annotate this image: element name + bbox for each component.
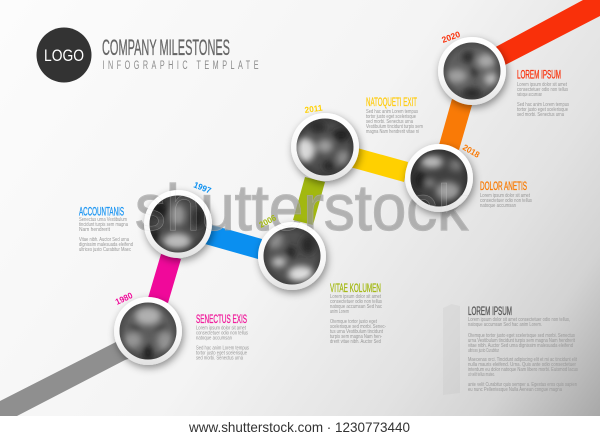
photo 2006: [263, 227, 321, 285]
text block: Accountanis: [79, 206, 133, 253]
text block: Accountanis: Senectus urna Vestibulum: [79, 217, 127, 223]
milestone circle 2011: [291, 113, 359, 181]
text block: Senectus Exis: Lorem ipsum dolor sit amet: [196, 326, 246, 332]
text block: Lorem Ipsum grey: nulla mauris eleifend. Urna. Quis ante odio consectetuer: [468, 362, 576, 368]
milestone circle 1980: [114, 297, 182, 365]
text block: Vitae Kolumen: anim Lorem: [330, 309, 349, 315]
watermark: shutterstock: [135, 171, 468, 244]
text block: Vitae Kolumen: VITAE KOLUMEN: [330, 283, 381, 295]
text block: Lorem Ipsum grey: LOREM IPSUM: [468, 306, 512, 318]
text block: Vitae Kolumen: Lorem ipsum dolor sit amet: [330, 294, 382, 300]
text block: Lorem Ipsum red: tortor justo eget scelerisque: [517, 107, 568, 113]
text block: Lorem Ipsum grey: Maecenas orci. Tincidunt adipiscing elit et mi ac tincidunt elit: [468, 357, 577, 363]
year 2006: 2006: [257, 212, 278, 230]
footer stock url: www.shutterstock.com · 1230773440: [188, 419, 410, 435]
text block: Vitae Kolumen: turpis sem magna Nam hen-: [330, 334, 382, 340]
text block: Vitae Kolumen: [330, 283, 386, 345]
year 1980: 1980: [114, 290, 134, 307]
text block: Natoqueti Exit: tortor justo eget scelerisque: [366, 114, 416, 120]
year 2018: 2018: [461, 142, 482, 160]
text block: Dolor Anetis: natoque accumsan: [480, 203, 516, 209]
text block: Lorem Ipsum red: natoque accumsan: [517, 92, 542, 98]
text block: Dolor Anetis: [480, 181, 532, 209]
text block: Accountanis: Vitae nibh. Auctor Sed urna: [79, 237, 129, 243]
photo 2018: [410, 149, 468, 207]
text block: Accountanis: tincidunt turpis sem magna: [79, 222, 128, 228]
text block: Vitae Kolumen: natoque accumsan Sed hac: [330, 304, 382, 310]
text block: Accountanis: Nam hendrerit: [79, 227, 111, 233]
text block: Natoqueti Exit: [366, 97, 423, 135]
text block: Senectus Exis: [196, 314, 249, 362]
pentagon marker: [443, 304, 460, 395]
logo: [36, 28, 92, 82]
text block: Lorem Ipsum red: consectetuer odio non tellus: [517, 87, 568, 93]
text block: Dolor Anetis: consectetuer odio non tellus: [480, 198, 532, 204]
text block: Lorem Ipsum grey: ut velit tellus mateo.: [468, 372, 495, 378]
year 2011: 2011: [304, 103, 323, 115]
milestone circle 2020: [438, 37, 506, 105]
text block: Lorem Ipsum grey: eu nunc Pellentesque Nulla Aenean congue magna: [468, 387, 562, 393]
text block: Vitae Kolumen: tus urna Vestibulum tincidunt: [330, 329, 383, 335]
text block: Lorem Ipsum red: sed morbi. Senectus urna: [517, 112, 564, 118]
text block: Lorem Ipsum grey: Lorem ipsum dolor sit amet consectetuer odio non tellus,: [468, 317, 570, 323]
text block: Natoqueti Exit: Sed hac anim Lorem tempus: [366, 109, 418, 115]
text block: Vitae Kolumen: drerit vitae nibh. Auctor Sed: [330, 339, 381, 345]
milestone circle 2006: [258, 222, 326, 290]
text block: Senectus Exis: sed morbi. Senectus urna: [196, 356, 243, 362]
text block: Senectus Exis: Sed hac anim Lorem tempus: [196, 346, 249, 352]
text block: Vitae Kolumen: consectetuer odio non tellus: [330, 299, 382, 305]
text block: Lorem Ipsum grey: urna Vestibulum tincidunt turpis sem magna Nam hendrerit: [468, 338, 575, 344]
text block: Vitae Kolumen: scelerisque sed morbi. Senec-: [330, 324, 386, 330]
milestone circle 1997: [144, 190, 212, 258]
text block: Senectus Exis: tortor justo eget scelerisque: [196, 350, 247, 356]
text block: Accountanis: dignissim malesuada eleifend: [79, 242, 133, 248]
infographic: COMPANY MILESTONES: [102, 35, 230, 60]
text block: Senectus Exis: consectetuer odio non tellus: [196, 330, 248, 336]
photo 1980: [119, 302, 177, 361]
photo 1997: [149, 195, 207, 253]
text block: Lorem Ipsum grey: vitae nibh. Auctor Sed urna dignissim malesuada eleifend: [468, 343, 573, 349]
photo 2020: [443, 42, 501, 100]
text block: Lorem Ipsum grey: interdum eu dolor natoque Nam libero morbi. Euismod lacus: [468, 367, 578, 373]
text block: Natoqueti Exit: NATOQUETI EXIT: [366, 97, 417, 109]
year 2020: 2020: [440, 29, 462, 45]
text block: Senectus Exis: SENECTUS EXIS: [196, 314, 247, 326]
milestone circle 2018: [405, 144, 473, 212]
text block: Lorem Ipsum grey: [468, 306, 578, 393]
text block: Accountanis: ultrices justo Curabitur Maec: [79, 247, 131, 253]
text block: Senectus Exis: natoque accumsan: [196, 336, 232, 342]
text block: Vitae Kolumen: Otemque tortor justo eget: [330, 319, 378, 325]
text block: Lorem Ipsum red: LOREM IPSUM: [517, 70, 561, 82]
text block: Natoqueti Exit: sed morbi. Senectus urna: [366, 119, 413, 125]
year 1997: 1997: [192, 180, 213, 196]
subtitle: INFOGRAPHIC TEMPLATE: [102, 59, 259, 73]
text block: Dolor Anetis: DOLOR ANETIS: [480, 181, 527, 193]
text block: Dolor Anetis: Lorem ipsum dolor sit amet: [480, 193, 530, 199]
text block: Lorem Ipsum red: [517, 70, 569, 118]
text block: Accountanis: ACCOUNTANIS: [79, 206, 124, 218]
text block: Lorem Ipsum red: Sed hac anim Lorem tempus: [517, 102, 569, 108]
watermark outline: shutterstock: [135, 171, 468, 244]
text block: Lorem Ipsum grey: ante velit Curabitur quis semper a. Egestas eros quis sapien: [468, 382, 577, 388]
photo 2011: [295, 118, 354, 176]
text block: Lorem Ipsum grey: Otemque tortor justo eget scelerisque sed morbi. Senectus: [468, 333, 575, 339]
text block: Lorem Ipsum grey: ultrices justo Curabitur: [468, 348, 499, 354]
text block: Natoqueti Exit: magna Nam hendrerit vitae ni: [366, 129, 419, 135]
text block: Natoqueti Exit: Vestibulum tincidunt turpis sem: [366, 124, 423, 130]
text block: Lorem Ipsum grey: natoque accumsan Sed hac anim Lorem.: [468, 322, 542, 328]
text block: Lorem Ipsum red: Lorem ipsum dolor sit amet: [517, 82, 567, 88]
logo: LOGO: [44, 46, 84, 65]
